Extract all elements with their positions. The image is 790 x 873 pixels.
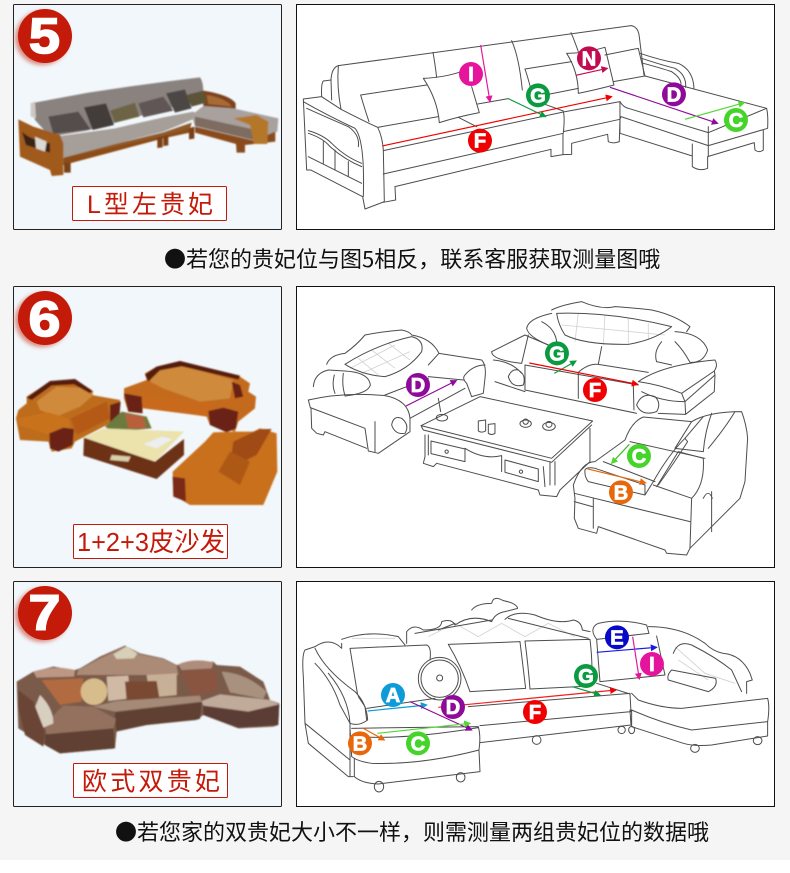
panel: sofa 5 line diagram	[296, 4, 774, 230]
double chaise sofa outline drawing	[303, 598, 769, 792]
label: 欧式双贵妃: 欧式双贵妃	[82, 768, 220, 796]
photo: European double chaise sofa	[17, 646, 279, 753]
panel: sofa 6 photo	[14, 286, 282, 568]
label: L型左贵妃	[72, 186, 226, 220]
icon: number badge 7	[15, 585, 72, 642]
measurement arrows	[382, 45, 744, 146]
letter badges: B	[614, 482, 628, 504]
letter badges: A	[386, 685, 400, 707]
letter badges: I	[468, 64, 474, 86]
icon: number badge 5	[15, 9, 72, 65]
letter badges	[459, 46, 748, 153]
measurement arrows	[363, 637, 657, 740]
photo: leather 1+2+3 sofa set	[16, 361, 277, 505]
letter badges: G	[578, 666, 594, 688]
letter badges: I	[649, 654, 655, 676]
three-seat sofa outline drawing	[492, 302, 716, 414]
letter badges: N	[582, 48, 596, 70]
panel: sofa 5 photo	[14, 4, 282, 230]
single chair outline drawing	[573, 412, 748, 555]
letter badges: C	[729, 110, 743, 132]
letter badges: D	[411, 375, 425, 397]
caption: double chaise note: ●若您家的双贵妃大小不一样，则需测量两组贵妃位的数据哦	[115, 815, 709, 847]
label: L型左贵妃: L型左贵妃	[87, 191, 213, 219]
letter badges: D	[667, 84, 681, 106]
letter badges: E	[610, 627, 624, 649]
letter badges: G	[549, 343, 565, 365]
photo: L-shaped wooden sofa	[18, 77, 278, 176]
panel: sofa 7 line diagram	[296, 582, 774, 806]
letter badges: B	[353, 733, 367, 755]
measurement arrows	[406, 361, 646, 483]
label: 1+2+3皮沙发: 1+2+3皮沙发	[77, 527, 225, 557]
letter badges	[406, 341, 651, 504]
sofa outline drawing	[303, 26, 768, 209]
letter badges: F	[474, 131, 486, 153]
panel: sofa 6 line diagram	[296, 286, 774, 568]
caption: reversed chaise note: ●若您的贵妃位与图5相反，联系客服获取测量图哦	[164, 242, 660, 274]
letter badges: F	[589, 380, 601, 402]
icon: number badge 6	[15, 291, 72, 347]
letter badges: F	[529, 702, 541, 724]
letter badges: C	[411, 733, 425, 755]
letter badges: D	[446, 697, 460, 719]
armchair outline drawing	[308, 330, 485, 453]
panel: sofa 7 photo	[14, 582, 282, 806]
letter badges: C	[632, 446, 646, 468]
coffee table outline drawing	[421, 397, 593, 497]
letter badges	[348, 625, 664, 755]
icon: number badge 5: 5	[29, 9, 60, 64]
icon: number badge 7: 7	[29, 585, 60, 641]
icon: number badge 6: 6	[29, 291, 60, 347]
letter badges: G	[530, 85, 546, 107]
